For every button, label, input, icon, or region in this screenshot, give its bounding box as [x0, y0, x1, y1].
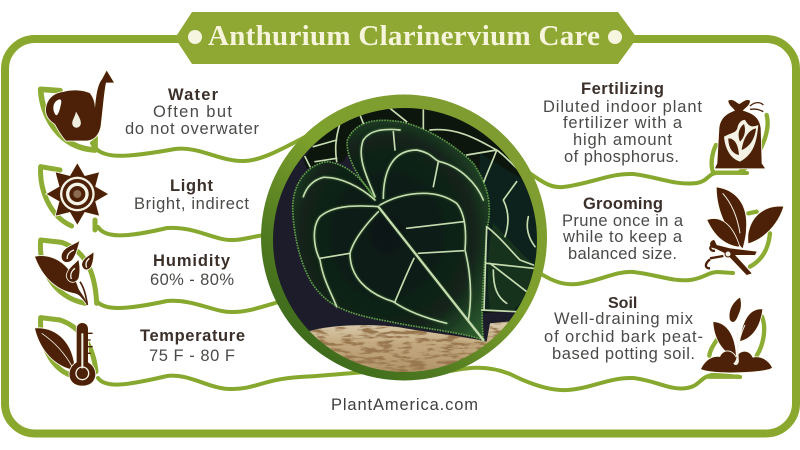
back leaves	[303, 105, 539, 313]
main veins	[378, 207, 483, 340]
text: temperature: 75 F - 80 F	[149, 347, 235, 365]
vein glow	[303, 129, 483, 340]
heading: light: Light	[170, 177, 214, 195]
text: light: Bright, indirect	[134, 195, 249, 213]
panel: fertilizing: of phosphorus.	[564, 148, 679, 166]
panel: grooming: balanced size.	[568, 245, 677, 263]
photo: anthurium leaf	[273, 108, 537, 372]
text: humidity: 60% - 80%	[150, 271, 234, 289]
text: water: Often but	[153, 103, 232, 121]
heading: humidity: Humidity	[153, 252, 231, 270]
sand	[310, 322, 508, 372]
text: soil: Well-draining mix	[554, 310, 694, 328]
panel: grooming	[562, 187, 783, 275]
icon: watering can	[41, 71, 114, 150]
icon: leaves and drops	[35, 240, 97, 305]
heading: water: Water	[168, 86, 219, 104]
text: grooming: Prune once in a	[562, 212, 684, 230]
back leaf veins	[430, 130, 527, 237]
panel: water: do not overwater	[125, 120, 260, 138]
title: Anthurium Clarinervium Care	[208, 20, 600, 52]
panel: light	[41, 163, 249, 230]
heading: soil: Soil	[608, 295, 637, 312]
panel: fertilizing	[543, 80, 768, 173]
title banner	[175, 12, 637, 64]
panel: fertilizing: fertilizer with a	[563, 114, 683, 132]
heading: fertilizing: Fertilizing	[581, 80, 664, 98]
icon: plant in soil	[701, 298, 772, 377]
icon: fertilizer bag	[712, 100, 768, 173]
photo ring	[261, 94, 547, 380]
icon: sun	[41, 163, 108, 230]
panel: grooming: while to keep a	[562, 228, 683, 246]
heading: grooming: Grooming	[583, 195, 663, 213]
text: fertilizing: Diluted indoor plant	[543, 98, 702, 116]
heading: temperature: Temperature	[140, 327, 245, 345]
panel: temperature	[35, 318, 245, 386]
panel: fertilizing: high amount	[573, 131, 672, 149]
panel: water	[41, 71, 260, 150]
main leaf	[293, 120, 489, 340]
connecting vines	[92, 137, 747, 390]
icon: leaf and thermometer	[35, 318, 96, 386]
icon: leaves and shears	[706, 187, 783, 275]
website credit: PlantAmerica.com	[331, 396, 478, 414]
panel: soil	[544, 295, 772, 377]
panel: soil: of orchid bark peat-	[544, 328, 703, 346]
panel: soil: based potting soil.	[552, 345, 695, 363]
panel: humidity	[35, 240, 234, 305]
